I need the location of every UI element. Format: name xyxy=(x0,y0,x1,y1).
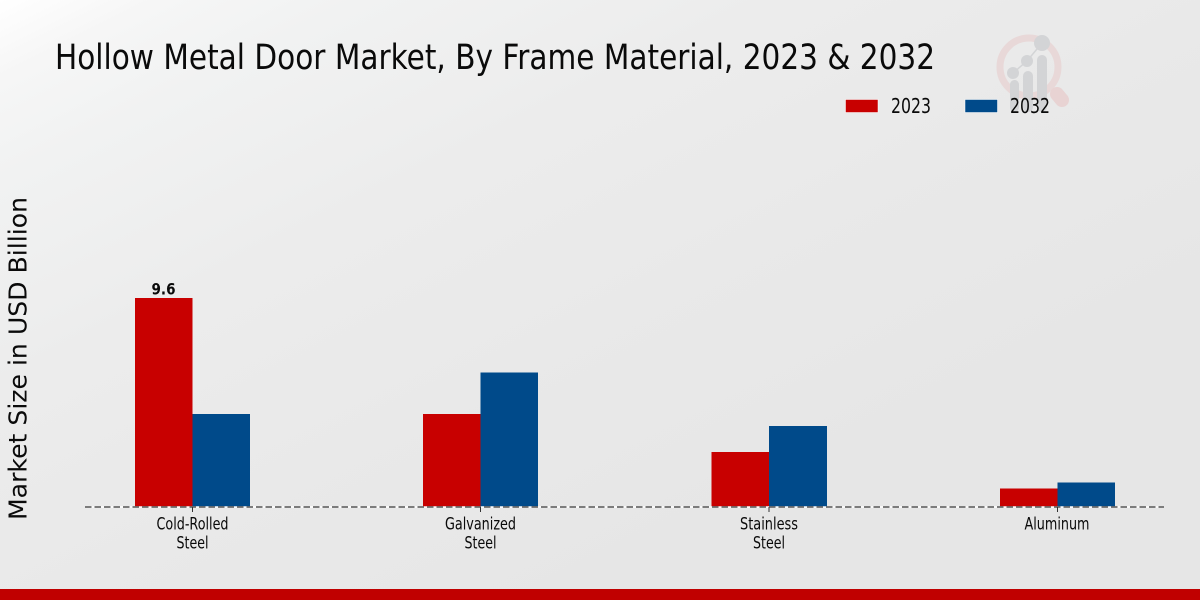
legend: 2032: 2032 xyxy=(1010,94,1050,118)
white axis underlay xyxy=(85,506,1164,508)
legend: 2023: 2023 xyxy=(891,94,931,118)
category label: Cold-Rolled Steel xyxy=(156,514,228,554)
title: Hollow Metal Door Market, By Frame Material, 2023 & 2032 xyxy=(55,38,935,78)
bars: Aluminum xyxy=(1000,482,1115,507)
value label: 9.6 xyxy=(152,280,176,298)
tick marks xyxy=(192,507,1058,512)
bars: Stainless Steel xyxy=(712,426,827,507)
x axis baseline xyxy=(85,506,1164,508)
category label: Aluminum: Aluminum xyxy=(1024,514,1090,534)
legend xyxy=(846,94,1050,118)
category label: Galvanized Steel: Galvanized xyxy=(445,514,516,534)
bars: Cold-Rolled Steel xyxy=(135,298,250,507)
category label: Stainless Steel xyxy=(740,514,798,554)
legend: 2032 xyxy=(965,94,1050,118)
bar chart xyxy=(85,280,1164,512)
category label: Galvanized Steel: Steel xyxy=(464,534,496,554)
footer bar xyxy=(0,589,1200,600)
icon: watermark logo xyxy=(1000,35,1062,112)
legend: 2023 xyxy=(846,94,931,118)
category label: Cold-Rolled Steel: Cold-Rolled xyxy=(156,514,228,534)
category label: Stainless Steel: Steel xyxy=(753,534,785,554)
category label: Stainless Steel: Stainless xyxy=(740,514,798,534)
bars: Galvanized Steel xyxy=(423,372,538,507)
category label: Cold-Rolled Steel: Steel xyxy=(176,534,208,554)
category label: Galvanized Steel xyxy=(445,514,516,554)
y axis label: Market Size in USD Billion xyxy=(4,197,32,520)
